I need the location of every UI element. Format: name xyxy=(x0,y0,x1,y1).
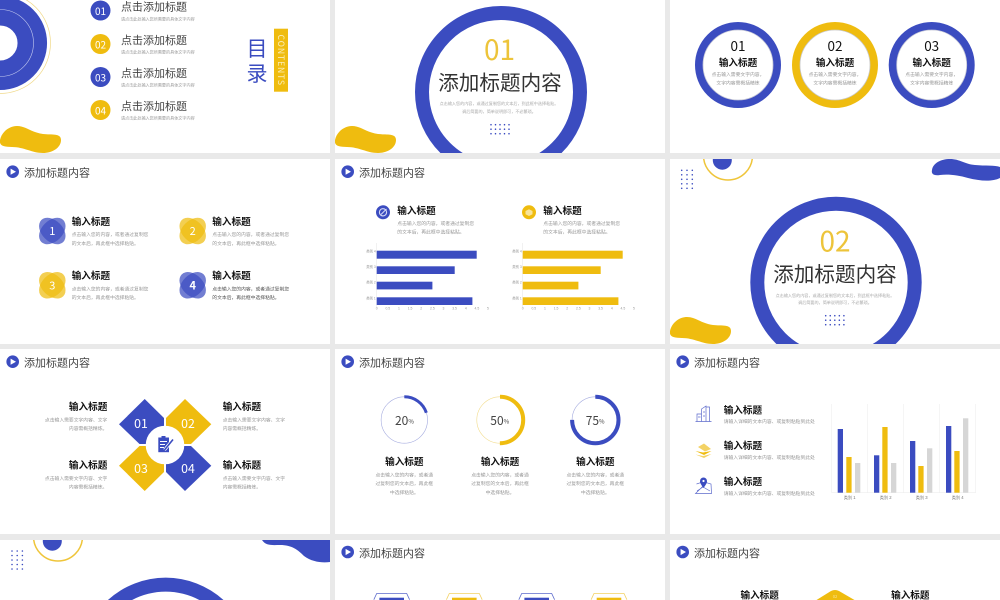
center clipboard icon xyxy=(146,426,184,464)
contents item 02: 请点击此处输入您所需要的具体文字内容 xyxy=(121,49,195,55)
blue blob xyxy=(262,540,330,562)
slide heading xyxy=(341,165,425,180)
progress 20% xyxy=(376,397,433,496)
right bar chart: 1 xyxy=(544,306,546,310)
circle card 03: 03 xyxy=(924,35,939,55)
section description xyxy=(440,100,558,114)
left bar chart: 类别 2 xyxy=(366,280,376,285)
column chart: 类别 1 xyxy=(844,494,856,501)
right text block: 的文本后，再此框中选择粘贴。 xyxy=(543,229,610,236)
panel: shields slide (cropped) xyxy=(335,540,665,600)
slide heading xyxy=(341,546,425,560)
contents item 02: 点击添加标题 xyxy=(121,33,187,47)
right text block xyxy=(522,205,620,236)
circle card 03 xyxy=(893,26,971,104)
progress 75%: 75% xyxy=(586,412,605,429)
left bottom text: 点击输入需要文字内容、文字 xyxy=(45,475,107,482)
slide heading xyxy=(341,355,425,370)
left bar chart: 2 xyxy=(420,306,422,310)
item 1: 的文本后，再此框中选择粘贴。 xyxy=(72,240,139,247)
shield 1 xyxy=(374,594,410,600)
contents heading xyxy=(246,38,268,86)
column chart: 类别 3 xyxy=(916,494,928,501)
item 3: 输入标题 xyxy=(72,270,110,282)
circle card 01: 输入标题 xyxy=(719,57,758,69)
progress 75%: 输入标题 xyxy=(576,456,615,468)
item 2: 的文本后，再此框中选择粘贴。 xyxy=(212,240,279,247)
circle card 02: 点击输入需要文字内容， xyxy=(809,71,861,78)
item 2: 点击输入您的内容，或者通过复制您 xyxy=(212,231,289,238)
contents item 01 xyxy=(90,0,195,21)
left bar chart: 4 xyxy=(465,306,467,310)
gold blob xyxy=(670,317,731,344)
contents item 01: 01 xyxy=(95,3,106,18)
left bottom text: 内容需概括精炼。 xyxy=(69,483,107,490)
right bar chart: 3.5 xyxy=(598,306,603,310)
slide heading: 添加标题内容 xyxy=(359,546,425,560)
slide heading: 添加标题内容 xyxy=(694,546,760,560)
circle card 02: 输入标题 xyxy=(816,57,855,69)
item: building xyxy=(696,404,815,425)
right bar chart: 类别 1 xyxy=(512,295,522,300)
section title: 添加标题内容 xyxy=(773,263,897,286)
item 2: 2 xyxy=(190,223,196,239)
left bar chart: 类别 3 xyxy=(366,264,376,269)
left text block xyxy=(376,205,474,236)
diamond 04: 04 xyxy=(181,459,195,477)
item 4: 点击输入您的内容，或者通过复制您 xyxy=(212,285,289,292)
progress 20%: 20% xyxy=(395,412,414,429)
contents item 03: 请点击此处输入您所需要的具体文字内容 xyxy=(121,82,195,88)
contents heading: 目 xyxy=(246,38,268,61)
left bottom text xyxy=(45,460,108,490)
item 4: 4 xyxy=(189,277,196,293)
left top text: 内容需概括精炼。 xyxy=(69,425,107,432)
left bar chart: 1 xyxy=(398,306,400,310)
item 4 xyxy=(174,267,289,304)
left bar chart: 3 xyxy=(443,306,445,310)
column chart: 类别 2 xyxy=(880,494,892,501)
left bar chart xyxy=(366,243,489,310)
contents item 02 xyxy=(90,33,195,55)
contents item 03 xyxy=(90,66,195,88)
section description: 调后简要的，简单说明即可，不必繁琐。 xyxy=(798,299,872,305)
item 4: 输入标题 xyxy=(212,270,251,282)
right bar chart: 0.5 xyxy=(531,306,536,310)
left bar chart: 0.5 xyxy=(385,306,390,310)
slide heading xyxy=(6,165,90,180)
panel: three circles slide xyxy=(670,0,1000,153)
progress 75% xyxy=(567,397,624,496)
diamond 02 xyxy=(166,399,211,444)
right top text xyxy=(223,401,285,432)
progress 50%: 中选择粘贴。 xyxy=(486,489,514,496)
slide heading: 添加标题内容 xyxy=(359,166,425,180)
left bottom text: 输入标题 xyxy=(69,459,108,471)
right bottom text: 点击输入需要文字内容、文字 xyxy=(223,475,285,482)
right bottom text: 内容需概括精炼。 xyxy=(223,483,261,490)
right bar chart: 类别 2 xyxy=(512,280,522,285)
circle card 03: 点击输入需要文字内容， xyxy=(905,71,958,78)
right bar chart: 4.5 xyxy=(621,306,625,310)
dot grid xyxy=(12,551,22,569)
slide heading xyxy=(6,355,90,370)
item 4: 的文本后，再此框中选择粘贴。 xyxy=(212,294,279,301)
right bar chart: 5 xyxy=(633,306,635,310)
shield 3 xyxy=(519,594,555,600)
item: stack: 请输入详细的文本内容、或复制粘贴到此处 xyxy=(724,454,815,461)
left bar chart: 类别 4 xyxy=(366,249,376,254)
contents item 01: 请点击此处输入您所需要的具体文字内容 xyxy=(121,15,195,21)
item 1: 1 xyxy=(49,223,55,239)
progress 20%: 输入标题 xyxy=(385,456,424,468)
item 2 xyxy=(174,213,289,249)
right bar chart xyxy=(512,243,635,310)
right top text: 内容需概括精炼。 xyxy=(223,425,261,432)
left top text: 输入标题 xyxy=(69,401,108,413)
slide heading: 添加标题内容 xyxy=(694,356,760,370)
right bar chart: 2.5 xyxy=(576,306,581,310)
left bar chart: 0 xyxy=(376,306,378,310)
panel: contents slide xyxy=(0,0,330,153)
item 3 xyxy=(34,267,149,304)
circle card 03: 输入标题 xyxy=(913,57,951,69)
diamond 02: 02 xyxy=(181,414,195,432)
item: stack: 输入标题 xyxy=(724,440,762,452)
section title: 添加标题内容 xyxy=(438,72,562,95)
progress 20%: 中选择粘贴。 xyxy=(390,489,419,496)
left bar chart: 3.5 xyxy=(452,306,457,310)
dot grid xyxy=(491,125,509,134)
right bottom text xyxy=(223,460,285,490)
left bar chart: 4.5 xyxy=(475,306,479,310)
right text block: 点击输入您的内容，或者通过复制您 xyxy=(543,220,620,227)
shield 2 xyxy=(446,594,482,600)
circle card 01: 文字内容需概括精炼 xyxy=(716,80,760,87)
contents label xyxy=(274,29,288,92)
progress 75%: 中选择粘贴。 xyxy=(581,489,610,496)
slide heading: 添加标题内容 xyxy=(359,356,425,370)
dot grid xyxy=(826,316,844,325)
item 3: 3 xyxy=(49,277,55,293)
circle card 02 xyxy=(796,26,874,104)
left bar chart: 类别 1 xyxy=(366,295,376,300)
gold hexagon xyxy=(816,590,854,600)
right bar chart: 4 xyxy=(611,306,613,310)
panel: four flowers slide xyxy=(0,159,330,344)
item 2: 输入标题 xyxy=(212,216,251,228)
panel: section 03 cover (cropped) xyxy=(0,540,330,600)
right top text: 点击输入需要文字内容、文字 xyxy=(223,416,285,423)
contents item 04: 04 xyxy=(95,103,106,118)
item 1: 点击输入您的内容，或者通过复制您 xyxy=(72,231,149,238)
left top text: 点击输入需要文字内容、文字 xyxy=(45,416,107,423)
diamond 03: 03 xyxy=(134,459,148,477)
contents item 04: 请点击此处输入您所需要的具体文字内容 xyxy=(121,115,195,121)
progress 50%: 过复制您的文本后，再此框 xyxy=(471,480,529,487)
item 3: 的文本后，再此框中选择粘贴。 xyxy=(72,294,139,301)
slide heading: 添加标题内容 xyxy=(24,356,90,370)
left bar chart: 2.5 xyxy=(430,306,435,310)
contents item 02: 02 xyxy=(95,37,106,52)
left text block: 点击输入您的内容，或者通过复制您 xyxy=(397,220,474,227)
circle card 01 xyxy=(699,26,777,104)
panel: section 01 cover xyxy=(335,0,665,153)
diamond 03 xyxy=(119,446,164,491)
progress 20%: 过复制您的文本后，再此框 xyxy=(376,480,433,487)
progress 50%: 点击输入您的内容，或者通 xyxy=(471,471,529,478)
left top text xyxy=(45,401,108,432)
circle card 02: 02 xyxy=(828,35,842,55)
contents item 03: 点击添加标题 xyxy=(121,66,187,80)
circle card 03: 文字内容需概括精炼 xyxy=(910,80,953,87)
panel: progress rings slide xyxy=(335,349,665,534)
item: building: 输入标题 xyxy=(724,404,762,416)
contents heading: 录 xyxy=(246,63,268,86)
gold ring with blue half circle xyxy=(704,131,752,180)
diamond 01 xyxy=(119,399,164,444)
circle card 01: 点击输入需要文字内容， xyxy=(712,71,764,78)
contents item 01: 点击添加标题 xyxy=(121,0,187,14)
dot grid top left xyxy=(682,170,692,188)
right text block: 输入标题 xyxy=(543,205,582,217)
panel: horizontal bar charts slide xyxy=(335,159,665,344)
item: stack xyxy=(696,440,815,461)
right bottom text: 输入标题 xyxy=(223,459,261,471)
left bar chart: 5 xyxy=(487,306,489,310)
right bar chart: 类别 4 xyxy=(512,249,522,254)
diamond 04 xyxy=(166,446,211,491)
contents item 03: 03 xyxy=(95,70,106,85)
column chart xyxy=(832,404,976,501)
contents item 04 xyxy=(90,99,195,121)
contents label: CONTENTS xyxy=(275,35,287,86)
item: map pin xyxy=(696,476,815,497)
panel: diamond matrix slide xyxy=(0,349,330,534)
slide heading xyxy=(676,546,760,560)
right bar chart: 0 xyxy=(522,306,524,310)
circle card 02: 文字内容需概括精炼 xyxy=(813,80,857,87)
blue ring xyxy=(108,578,224,600)
section description: 点击输入您的内容，或通过复制您的文本后，到此框中选择粘贴。 xyxy=(776,292,894,298)
progress 50%: 50% xyxy=(490,412,510,429)
progress 20%: 点击输入您的内容，或者通 xyxy=(376,471,433,478)
progress 50% xyxy=(471,397,529,496)
right bar chart: 类别 3 xyxy=(512,264,522,269)
left bar chart: 1.5 xyxy=(408,306,413,310)
panel: column chart slide xyxy=(670,349,1000,534)
shield 4 xyxy=(591,594,627,600)
progress 75%: 点击输入您的内容，或者通 xyxy=(567,471,624,478)
progress 50%: 输入标题 xyxy=(481,456,520,468)
blue blob xyxy=(932,159,1000,181)
diamond 01: 01 xyxy=(134,414,148,432)
right top text: 输入标题 xyxy=(223,401,261,413)
left text block: 的文本后，再此框中选择粘贴。 xyxy=(397,229,464,236)
concentric ring decoration xyxy=(0,0,50,94)
item 1 xyxy=(34,213,149,249)
blue ring xyxy=(422,13,580,171)
section description: 点击输入您的内容，或通过复制您的文本后，到此框中选择粘贴。 xyxy=(440,100,558,106)
section description xyxy=(776,292,894,305)
panel: section 02 cover xyxy=(670,159,1000,344)
item 3: 点击输入您的内容，或者通过复制您 xyxy=(72,285,149,292)
gold ring with blue half circle xyxy=(34,512,82,561)
item: map pin: 请输入详细的文本内容、或复制粘贴到此处 xyxy=(724,490,815,497)
item: map pin: 输入标题 xyxy=(724,476,762,488)
panel: hexagon slide (cropped) xyxy=(670,540,1000,600)
blue ring xyxy=(757,204,915,361)
section description: 调后简要的，简单说明即可，不必繁琐。 xyxy=(462,108,536,114)
right bar chart: 2 xyxy=(566,306,568,310)
gold blob xyxy=(0,126,61,153)
section number: 02 xyxy=(819,221,851,260)
right bar chart: 3 xyxy=(589,306,591,310)
circle card 01: 01 xyxy=(730,35,746,55)
left text block: 输入标题 xyxy=(397,205,436,217)
slide heading xyxy=(676,355,760,370)
section number: 01 xyxy=(484,29,515,69)
contents item 04: 点击添加标题 xyxy=(121,99,187,113)
column chart: 类别 4 xyxy=(952,494,964,501)
right bar chart: 1.5 xyxy=(554,306,559,310)
slide heading: 添加标题内容 xyxy=(24,166,90,180)
item 1: 输入标题 xyxy=(72,216,110,228)
progress 75%: 过复制您的文本后，再此框 xyxy=(567,480,624,487)
item: building: 请输入详细的文本内容、或复制粘贴到此处 xyxy=(724,418,815,425)
gold blob xyxy=(335,126,396,153)
